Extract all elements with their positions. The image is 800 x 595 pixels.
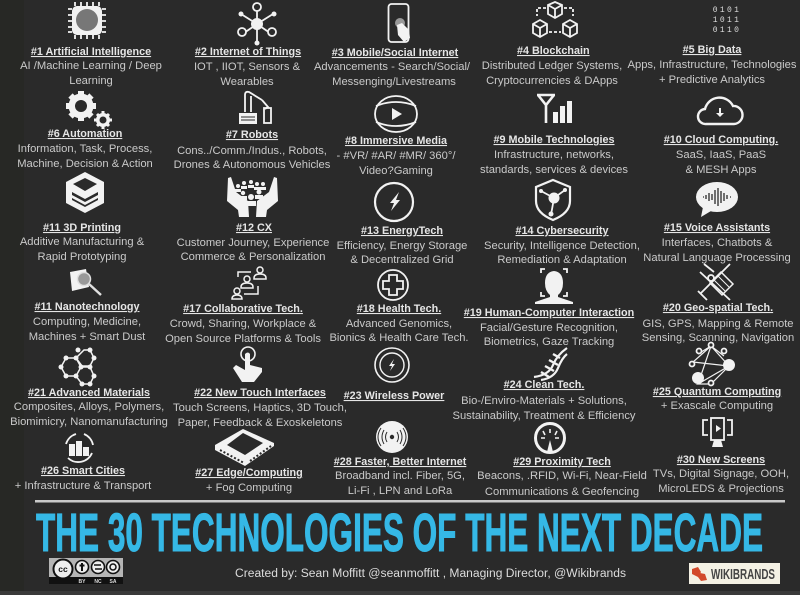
panel: #13 EnergyTech: #13 EnergyTech [361, 225, 443, 237]
panel: #24 Clean Tech: Bio-/Enviro-Materials + Solutions, [461, 395, 627, 407]
panel: #3 Mobile/Social Internet: #3 Mobile/Social Internet [332, 47, 459, 59]
panel: #23 Wireless Power [344, 348, 445, 402]
panel: #1 Artificial Intelligence: #1 Artificial Intelligence [31, 46, 151, 58]
panel: #19 Human-Computer Interaction [464, 269, 634, 348]
panel: #24 Clean Tech: Sustainability, Treatment & Efficiency [452, 410, 636, 422]
panel: #7 Robots: #7 Robots [226, 129, 278, 141]
panel: #2 Internet of Things: IOT , IIOT, Sensors & [194, 61, 301, 73]
panel: #15 Voice Assistants: Interfaces, Chatbots & [662, 237, 773, 249]
panel: #18 Health Tech: #18 Health Tech. [357, 303, 441, 315]
icon: wireless charging circle [375, 348, 409, 382]
panel: #28 Faster, Better Internet: Broadband incl. Fiber, 5G, [335, 470, 465, 482]
panel: #8 Immersive Media: #8 Immersive Media [345, 135, 448, 147]
panel: #13 EnergyTech [337, 183, 467, 266]
panel: #11 3D Printing [20, 172, 145, 263]
icon: kiosk screens [703, 418, 732, 447]
panel: #4 Blockchain: #4 Blockchain [517, 45, 590, 57]
panel: #27 Edge/Computing: #27 Edge/Computing [195, 467, 303, 479]
panel: #10 Cloud Computing: SaaS, IaaS, PaaS [676, 149, 766, 161]
panel: #29 Proximity Tech: Communications & Geofencing [485, 486, 639, 498]
badge: creative commons licence: NC [94, 579, 102, 585]
panel: #5 Big Data: Apps, Infrastructure, Technologies [628, 59, 797, 71]
panel: #21 Advanced Materials: #21 Advanced Materials [28, 387, 150, 399]
panel: #20 Geo-spatial Tech: Sensing, Scanning, Navigation [642, 332, 794, 344]
badge: creative commons licence: cc [58, 564, 68, 574]
panel: #30 New Screens: TVs, Digital Signage, OOH, [653, 468, 789, 480]
panel: #8 Immersive Media: - #VR/ #AR/ #MR/ 360°/ [337, 150, 456, 162]
icon: binary digits: 1011 [713, 16, 741, 25]
panel: #11 3D Printing: #11 3D Printing [43, 222, 121, 234]
credit line: Created by: Sean Moffitt @seanmoffitt , Managing Director, @Wikibrands [235, 568, 626, 580]
panel: #29 Proximity Tech: #29 Proximity Tech [513, 456, 611, 468]
panel: #12 CX: Customer Journey, Experience [177, 237, 329, 249]
icon: binary digits: 0101 [713, 6, 741, 15]
panel: #3 Mobile/Social Internet: Messenging/Livestreams [332, 76, 456, 88]
icon: proximity beacon [536, 424, 564, 452]
panel: #1 Artificial Intelligence: Learning [69, 75, 113, 87]
panel: #27 Edge/Computing: + Fog Computing [206, 482, 292, 494]
icon: voice speech bubble [696, 182, 738, 217]
panel: #2 Internet of Things: Wearables [220, 76, 274, 88]
panel: #28 Faster, Better Internet: Li-Fi , LPN and LoRa [348, 485, 453, 497]
panel: #9 Mobile Technologies: standards, services & devices [480, 164, 628, 176]
panel: #19 Human-Computer Interaction: Facial/Gesture Recognition, [480, 322, 618, 334]
panel: #2 Internet of Things: #2 Internet of Things [195, 46, 301, 58]
panel: #25 Quantum Computing: #25 Quantum Computing [653, 386, 781, 398]
icon: 3D cube layers [66, 172, 104, 213]
icon: touching hand [233, 347, 262, 382]
panel: #26 Smart Cities: + Infrastructure & Transport [15, 480, 152, 492]
panel: #4 Blockchain [482, 2, 622, 87]
panel: #20 Geo-spatial Tech: GIS, GPS, Mapping & Remote [642, 318, 794, 330]
panel: #21 Advanced Materials: Biomimicry, Nanomanufacturing [10, 416, 168, 428]
panel: #3 Mobile/Social Internet [314, 4, 471, 88]
panel: #18 Health Tech [329, 270, 469, 344]
icon: hands holding people [227, 177, 278, 217]
icon: connected cubes [533, 2, 577, 37]
panel: #21 Advanced Materials: Composites, Alloys, Polymers, [14, 401, 164, 413]
panel: #14 Cybersecurity: #14 Cybersecurity [515, 225, 609, 237]
panel: #10 Cloud Computing: & MESH Apps [686, 164, 757, 176]
panel: #15 Voice Assistants: #15 Voice Assistants [664, 222, 770, 234]
icon: people exchange [232, 267, 266, 299]
panel: #18 Health Tech: Bionics & Health Care Tech. [329, 332, 469, 344]
panel: #5 Big Data: + Predictive Analytics [659, 74, 765, 86]
panel: #18 Health Tech: Advanced Genomics, [346, 318, 452, 330]
icon: satellite [698, 264, 733, 300]
panel: #27 Edge/Computing [195, 429, 303, 494]
icon: phone with touch [388, 4, 410, 42]
panel: #1 Artificial Intelligence: AI /Machine Learning / Deep [20, 60, 162, 72]
panel: #28 Faster, Better Internet [334, 421, 467, 497]
panel: #30 New Screens: #30 New Screens [677, 454, 765, 466]
panel: #8 Immersive Media [337, 96, 456, 177]
panel: #24 Clean Tech [452, 348, 636, 422]
icon: DNA helix [534, 348, 567, 380]
panel: #7 Robots: Cons../Comm./Indus., Robots, [177, 145, 327, 157]
panel: #17 Collaborative Tech: Open Source Platforms & Tools [165, 333, 321, 345]
badge: creative commons licence [49, 558, 123, 585]
panel: #30 New Screens: MicroLEDS & Projections [658, 483, 784, 495]
panel: #10 Cloud Computing: #10 Cloud Computing. [664, 134, 778, 146]
panel: #15 Voice Assistants: Natural Language Processing [643, 252, 791, 264]
icon: city with cycle arrows [66, 434, 93, 462]
icon: molecule hexagons [58, 348, 96, 386]
panel: #12 CX: Commerce & Personalization [181, 251, 325, 263]
panel: #19 Human-Computer Interaction: Biometrics, Gaze Tracking [484, 336, 614, 348]
icon: binary digits [713, 6, 741, 35]
panel: #9 Mobile Technologies: #9 Mobile Technologies [494, 134, 614, 146]
panel: #1 Artificial Intelligence [20, 2, 162, 87]
panel: #26 Smart Cities: #26 Smart Cities [41, 465, 125, 477]
panel: #6 Automation: #6 Automation [48, 128, 122, 140]
panel: #15 Voice Assistants [643, 182, 791, 264]
icon: shield with nodes [536, 180, 570, 220]
panel: #22 New Touch Interfaces [173, 347, 347, 429]
panel: #8 Immersive Media: Video?Gaming [359, 165, 433, 177]
panel: #6 Automation: Information, Task, Process, [18, 143, 152, 155]
panel: #4 Blockchain: Cryptocurrencies & DApps [486, 75, 618, 87]
panel: #13 EnergyTech: Efficiency, Energy Storage [337, 240, 467, 252]
panel: #9 Mobile Technologies: Infrastructure, networks, [494, 149, 614, 161]
icon: cloud download [698, 98, 743, 124]
panel: #20 Geo-spatial Tech [642, 264, 794, 344]
panel: #4 Blockchain: Distributed Ledger Systems, [482, 60, 622, 72]
panel: #16 Nanotechnology [29, 269, 146, 343]
panel: #17 Collaborative Tech [165, 267, 321, 345]
panel: #16 Nanotechnology: Computing, Medicine, [33, 316, 141, 328]
panel: #7 Robots [174, 92, 331, 171]
panel: #14 Cybersecurity: Remediation & Adaptation [497, 254, 627, 266]
panel: #11 3D Printing: Additive Manufacturing & [20, 236, 145, 248]
panel: #9 Mobile Technologies [480, 95, 628, 176]
icon: gears [66, 91, 112, 129]
panel: #21 Advanced Materials [10, 348, 168, 428]
panel: #26 Smart Cities [15, 434, 152, 492]
divider line [35, 500, 785, 502]
icon: broadcast signal [376, 421, 408, 453]
icon: binary digits: 0110 [713, 26, 741, 35]
logo: Wikibrands [689, 563, 780, 584]
icon: connected nodes [238, 3, 276, 46]
panel: #7 Robots: Drones & Autonomous Vehicles [174, 159, 331, 171]
panel: #14 Cybersecurity [484, 180, 640, 266]
icon: quantum network [690, 342, 735, 386]
panel: #16 Nanotechnology: Machines + Smart Dust [29, 331, 146, 343]
panel: #17 Collaborative Tech: #17 Collaborative Tech. [183, 303, 303, 315]
panel: #28 Faster, Better Internet: #28 Faster, Better Internet [334, 456, 467, 468]
panel: #24 Clean Tech: #24 Clean Tech. [504, 379, 584, 391]
panel: #5 Big Data: #5 Big Data [683, 44, 742, 56]
panel: #23 Wireless Power: #23 Wireless Power [344, 390, 445, 402]
panel: #22 New Touch Interfaces: Paper, Feedback & Exoskeletons [178, 417, 343, 429]
icon: microchip [215, 429, 274, 466]
panel: #3 Mobile/Social Internet: Advancements - Search/Social/ [314, 61, 471, 73]
icon: magnifier on sheet [70, 269, 101, 295]
panel: #10 Cloud Computing [664, 98, 778, 176]
panel: #14 Cybersecurity: Security, Intelligence Detection, [484, 240, 640, 252]
panel: #6 Automation [17, 91, 153, 170]
panel: #25 Quantum Computing: + Exascale Computing [661, 400, 773, 412]
panel: #11 3D Printing: Rapid Prototyping [38, 251, 126, 263]
panel: #13 EnergyTech: & Decentralized Grid [350, 254, 454, 266]
icon: lightning circle [375, 183, 413, 221]
panel: #5 Big Data [628, 6, 797, 86]
panel: #2 Internet of Things [194, 3, 301, 88]
icon: brain chip [68, 2, 106, 39]
panel: #22 New Touch Interfaces: #22 New Touch Interfaces [194, 387, 326, 399]
icon: medical cross [378, 270, 408, 300]
icon: face recognition [535, 269, 573, 304]
badge: creative commons licence: BY [79, 579, 86, 585]
icon: signal bars [537, 95, 572, 123]
panel: #12 CX: #12 CX [236, 222, 273, 234]
panel: #12 CX [177, 177, 329, 263]
panel: #6 Automation: Machine, Decision & Action [17, 158, 153, 170]
panel: #30 New Screens [653, 418, 789, 495]
panel: #16 Nanotechnology: #11 Nanotechnology [34, 301, 140, 313]
panel: #29 Proximity Tech: Beacons, .RFID, Wi-Fi, Near-Field [477, 470, 647, 482]
panel: #17 Collaborative Tech: Crowd, Sharing, Workplace & [170, 318, 317, 330]
panel: #25 Quantum Computing [653, 342, 781, 412]
icon: VR sphere [375, 96, 417, 132]
panel: #22 New Touch Interfaces: Touch Screens, Haptics, 3D Touch, [173, 402, 347, 414]
panel: #20 Geo-spatial Tech: #20 Geo-spatial Tech. [663, 302, 773, 314]
icon: robot arm [239, 92, 271, 124]
panel: #19 Human-Computer Interaction: #19 Human-Computer Interaction [464, 307, 634, 319]
panel: #29 Proximity Tech [477, 424, 647, 498]
badge: creative commons licence: SA [110, 579, 117, 585]
